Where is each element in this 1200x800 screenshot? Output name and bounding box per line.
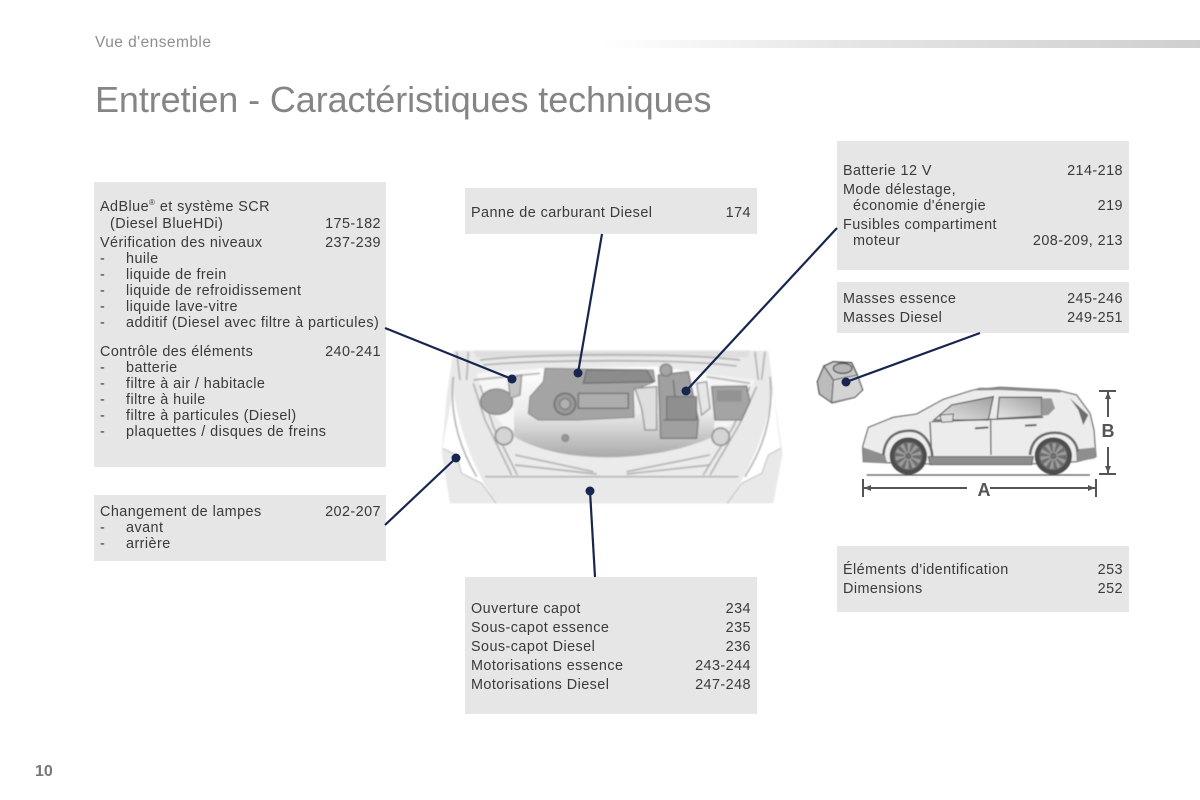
dimension: length A	[863, 479, 1096, 500]
panel: identification	[837, 546, 1129, 612]
arrow: carburant to engine	[578, 234, 602, 373]
panel: lamps: -	[100, 536, 105, 552]
wheel arches	[883, 431, 1078, 457]
dimension: height B	[1099, 391, 1116, 474]
panel: hood and engines: Sous-capot essence	[471, 620, 609, 636]
panel: fuel: Panne de carburant Diesel	[471, 205, 652, 221]
upper white area beside bay	[477, 368, 540, 440]
panel: battery: Batterie 12 V	[843, 163, 932, 179]
panel: battery: Fusibles compartiment	[843, 217, 997, 233]
panel: AdBlue and checks: (Diesel BlueHDi)	[110, 216, 223, 232]
marker dots	[452, 368, 850, 496]
panel: fuel: 174	[726, 205, 751, 221]
panel: AdBlue and checks: -	[100, 360, 105, 376]
panel: AdBlue and checks: -	[100, 251, 105, 267]
panel: masses	[837, 282, 1129, 333]
panel: AdBlue and checks: additif (Diesel avec filtre à particules)	[126, 315, 379, 331]
ground line	[867, 473, 1090, 477]
panel: masses: 249-251	[1067, 310, 1123, 326]
strut tops	[495, 427, 513, 445]
battery	[712, 386, 750, 420]
panel: hood and engines: 236	[726, 639, 751, 655]
panel: AdBlue and checks: Vérification des niveaux	[100, 235, 263, 251]
panel: AdBlue and checks: 237-239	[325, 235, 381, 251]
reservoir	[481, 389, 513, 414]
illustration: engine bay	[442, 351, 783, 503]
panel: battery	[837, 141, 1129, 270]
bay void	[514, 367, 717, 457]
panel: battery: Mode délestage,	[843, 182, 956, 198]
front window	[934, 397, 993, 420]
dimension: height B: B	[1102, 421, 1114, 441]
panel: hood and engines: 243-244	[695, 658, 751, 674]
body lines	[930, 417, 1043, 455]
panel: AdBlue and checks: filtre à huile	[126, 392, 206, 408]
panel: AdBlue and checks: -	[100, 392, 105, 408]
headlamp outlines	[443, 448, 781, 503]
panel: hood and engines: Ouverture capot	[471, 601, 581, 617]
frame lines	[452, 352, 771, 477]
panel: AdBlue and checks: 175-182	[325, 216, 381, 232]
panel: identification: Éléments d'identification	[843, 562, 1009, 578]
arrow: lamps to headlight	[385, 458, 456, 525]
wheels	[890, 437, 927, 475]
panel: fuel	[465, 188, 757, 234]
arrow: battery to fuse box	[686, 228, 837, 391]
panel: AdBlue and checks: filtre à particules (Diesel)	[126, 408, 297, 424]
panel: AdBlue and checks: huile	[126, 251, 159, 267]
panel: identification: 252	[1098, 581, 1123, 597]
panel: lamps: Changement de lampes	[100, 504, 262, 520]
white wings	[443, 390, 496, 503]
panel: hood and engines: 235	[726, 620, 751, 636]
panel: battery: 219	[1098, 198, 1123, 214]
panel: lamps: 202-207	[325, 504, 381, 520]
car body	[863, 387, 1096, 464]
air filter and fuse box	[658, 372, 698, 438]
panel: lamps: arrière	[126, 536, 171, 552]
panel: battery: moteur	[853, 233, 900, 249]
panel: AdBlue and checks: liquide de frein	[126, 267, 227, 283]
panel: AdBlue and checks: -	[100, 376, 105, 392]
panel: masses: 245-246	[1067, 291, 1123, 307]
rear window	[997, 397, 1042, 419]
panel: AdBlue and checks: filtre à air / habitacle	[126, 376, 265, 392]
sill and bumpers	[928, 457, 1033, 465]
dimension: length A: A	[978, 480, 990, 500]
page number: 10	[35, 763, 53, 780]
cross member	[503, 437, 720, 475]
arrow: masses to mount	[846, 333, 980, 382]
engine cover	[528, 368, 655, 420]
panel: AdBlue and checks: -	[100, 299, 105, 315]
panel: battery: 208-209, 213	[1033, 233, 1123, 249]
panel: AdBlue and checks: AdBlue® et système SCR	[100, 198, 270, 215]
panel: AdBlue and checks: 240-241	[325, 344, 381, 360]
panel: lamps: avant	[126, 520, 163, 536]
bonnet front	[485, 477, 738, 503]
panel: identification: 253	[1098, 562, 1123, 578]
body surround	[442, 351, 783, 503]
fuse cover	[697, 382, 710, 415]
intake pipe	[635, 387, 657, 430]
panel: masses: Masses essence	[843, 291, 956, 307]
panel: masses: Masses Diesel	[843, 310, 942, 326]
panel: lamps	[94, 495, 386, 561]
panel: battery: économie d'énergie	[853, 198, 986, 214]
panel: hood and engines: Motorisations essence	[471, 658, 623, 674]
panel: AdBlue and checks: -	[100, 424, 105, 440]
panel: AdBlue and checks: plaquettes / disques de freins	[126, 424, 326, 440]
icon: engine mount block	[817, 362, 863, 403]
panel: AdBlue and checks: liquide lave-vitre	[126, 299, 238, 315]
panel: AdBlue and checks: -	[100, 408, 105, 424]
panel: lamps: -	[100, 520, 105, 536]
panel: hood and engines: Motorisations Diesel	[471, 677, 609, 693]
roof rail	[970, 388, 1062, 393]
header gradient bar	[600, 40, 1200, 48]
illustration: car side view	[863, 387, 1096, 475]
leader lines	[385, 228, 980, 577]
panel: AdBlue and checks: -	[100, 267, 105, 283]
arrow: niveaux to reservoir	[385, 328, 512, 379]
panel: hood and engines: 247-248	[695, 677, 751, 693]
panel: AdBlue and checks: -	[100, 283, 105, 299]
title: Entretien - Caractéristiques techniques	[95, 79, 711, 120]
panel: hood and engines: Sous-capot Diesel	[471, 639, 595, 655]
panel: AdBlue and checks: batterie	[126, 360, 178, 376]
panel: AdBlue and checks: liquide de refroidissement	[126, 283, 301, 299]
panel: hood and engines	[465, 577, 757, 714]
panel: AdBlue and checks	[94, 182, 386, 467]
panel: identification: Dimensions	[843, 581, 923, 597]
panel: AdBlue and checks: Contrôle des éléments	[100, 344, 253, 360]
panel: hood and engines: 234	[726, 601, 751, 617]
panel: battery: 214-218	[1067, 163, 1123, 179]
arrow: hood to bonnet	[590, 491, 595, 577]
panel: AdBlue and checks: -	[100, 315, 105, 331]
section label: Vue d'ensemble	[95, 34, 211, 51]
